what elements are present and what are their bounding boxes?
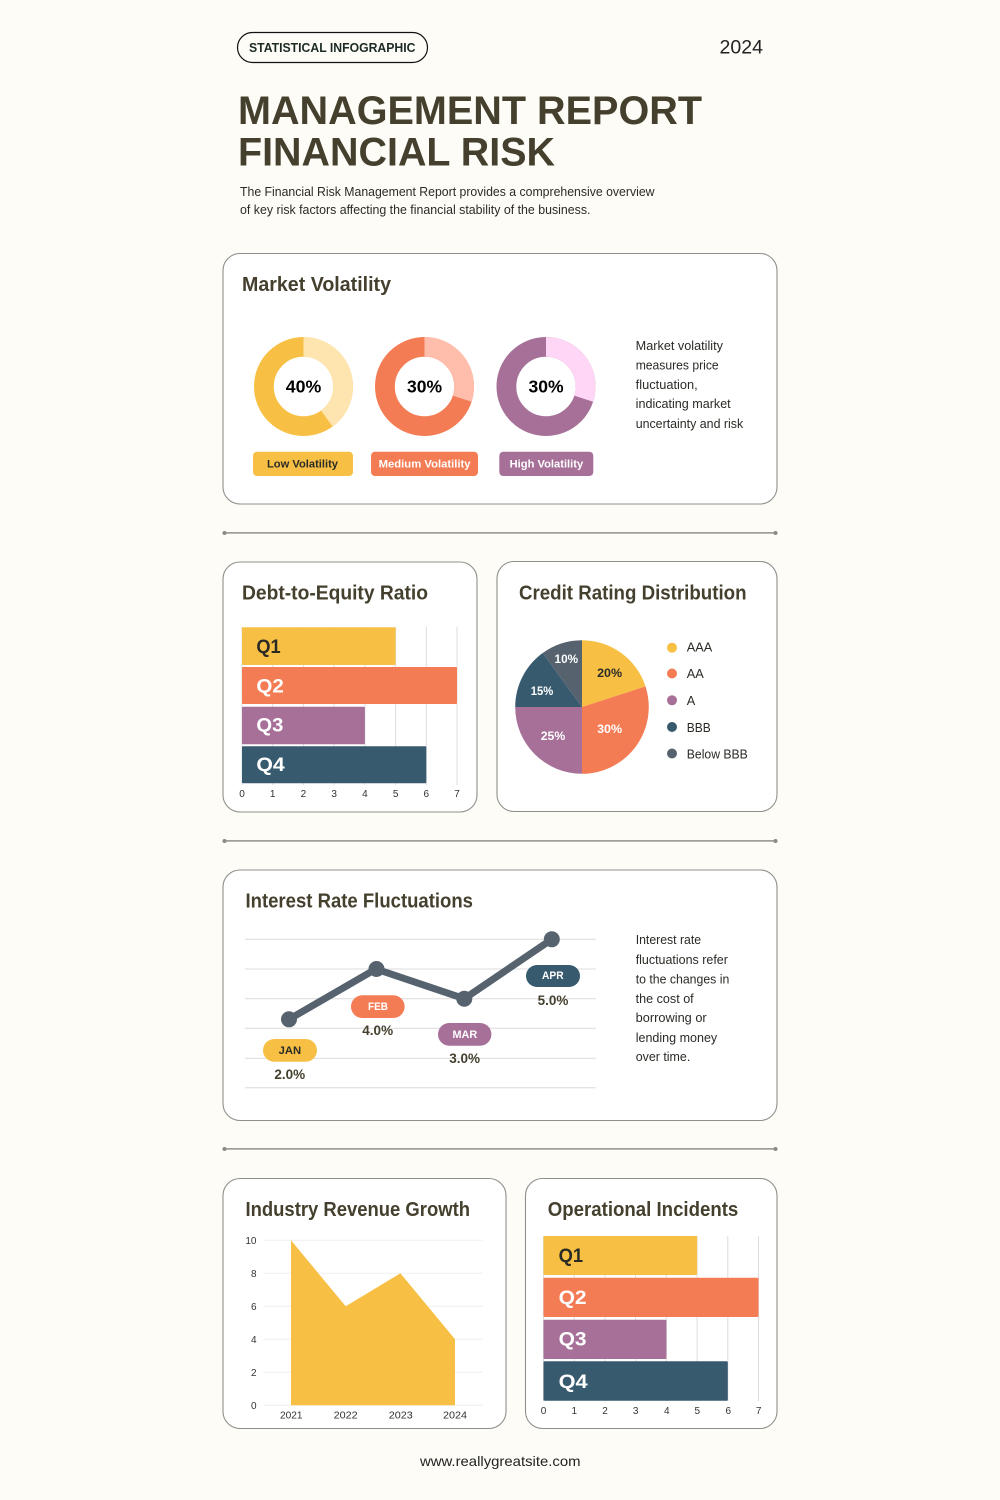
horizontal bar chart: incidents: Q3 (559, 1329, 587, 1351)
data label: march: MAR (452, 1029, 477, 1041)
area chart: revenue growth (245, 1236, 482, 1422)
area chart: revenue growth: 2022 (334, 1410, 358, 1422)
horizontal bar chart: incidents: 1 (572, 1406, 578, 1417)
area chart: revenue growth: 8 (251, 1269, 257, 1280)
text: market volatility description (636, 339, 744, 431)
horizontal bar chart: debt-to-equity: 1 (270, 789, 276, 800)
label: medium volatility (371, 452, 478, 476)
data label: april: APR (542, 970, 564, 982)
area chart: revenue growth: 2024 (443, 1410, 467, 1422)
data label: february: 4.0% (362, 1023, 393, 1038)
text: interest rate description (636, 933, 729, 1064)
heading: debt-to-equity ratio: Debt-to-Equity Ratio (242, 582, 428, 604)
area chart: revenue growth: 6 (251, 1302, 257, 1313)
data label: march: 3.0% (449, 1051, 480, 1066)
legend: credit ratings: AA (687, 667, 704, 681)
horizontal bar chart: debt-to-equity: 5 (393, 789, 399, 800)
data label: february: FEB (368, 1001, 388, 1013)
legend: credit ratings: Below BBB (687, 748, 748, 762)
intro text: The Financial Risk Management Report provides a comprehensive overview (240, 185, 655, 199)
data label: february (351, 995, 405, 1038)
header tag pill: STATISTICAL INFOGRAPHIC (249, 41, 416, 55)
legend: credit ratings (667, 640, 748, 762)
horizontal bar chart: debt-to-equity: 4 (362, 789, 368, 800)
footer url: www.reallygreatsite.com (419, 1453, 580, 1469)
pie chart: credit ratings: 20% (597, 666, 622, 680)
horizontal bar chart: incidents: 7 (756, 1406, 762, 1417)
text: interest rate description: Interest rate (636, 933, 701, 947)
horizontal bar chart: debt-to-equity (239, 627, 460, 800)
text: interest rate description: borrowing or (636, 1011, 707, 1025)
text: market volatility description: uncertainty and risk (636, 417, 744, 431)
pie chart: credit ratings: 25% (541, 729, 566, 743)
horizontal bar chart: debt-to-equity: 6 (424, 789, 430, 800)
horizontal bar chart: incidents: 5 (695, 1406, 701, 1417)
text: market volatility description: fluctuation, (636, 378, 698, 392)
data label: april (526, 965, 580, 1008)
heading: credit rating distribution: Credit Rating Distribution (519, 582, 746, 604)
text: interest rate description: lending money (636, 1031, 718, 1045)
panel: debt-to-equity ratio (223, 562, 477, 812)
text: interest rate description: to the changes in (636, 972, 729, 986)
horizontal bar chart: debt-to-equity: Q4 (256, 754, 285, 776)
intro text: of key risk factors affecting the financial stability of the business. (240, 203, 590, 217)
donut: low volatility 40% (264, 347, 343, 426)
horizontal bar chart: debt-to-equity: 7 (454, 789, 460, 800)
data label: january: JAN (279, 1045, 301, 1057)
label: high volatility (499, 452, 593, 476)
title: MANAGEMENT REPORT (238, 89, 702, 133)
panel: credit rating distribution (497, 562, 777, 812)
horizontal bar chart: incidents: Q1 (559, 1245, 583, 1267)
horizontal bar chart: incidents: Q4 (559, 1371, 588, 1393)
title: FINANCIAL RISK (238, 130, 555, 174)
area chart: revenue growth: 2 (251, 1368, 257, 1379)
label: low volatility: Low Volatility (267, 458, 339, 470)
divider 2 (222, 839, 778, 843)
legend: credit ratings: BBB (687, 721, 711, 735)
title (238, 89, 702, 174)
area chart: revenue growth: 2023 (389, 1410, 413, 1422)
heading: operational incidents: Operational Incidents (548, 1199, 738, 1221)
legend: credit ratings: AAA (687, 640, 713, 654)
horizontal bar chart: debt-to-equity: Q3 (256, 715, 284, 737)
panel: market volatility (223, 254, 777, 504)
heading: interest rate fluctuations: Interest Rate Fluctuations (246, 890, 473, 912)
data label: march (438, 1023, 491, 1066)
heading: market volatility: Market Volatility (242, 274, 392, 296)
horizontal bar chart: incidents (541, 1236, 762, 1417)
pie chart: credit ratings: 30% (597, 722, 622, 736)
text: interest rate description: the cost of (636, 992, 694, 1006)
divider 1 (222, 531, 778, 535)
data label: january: 2.0% (274, 1067, 305, 1082)
area chart: revenue growth: 4 (251, 1335, 257, 1346)
pie chart: credit ratings: 15% (531, 684, 554, 698)
area chart: revenue growth: 0 (251, 1401, 257, 1412)
text: market volatility description: indicating market (636, 397, 731, 411)
label: high volatility: High Volatility (510, 458, 584, 470)
horizontal bar chart: debt-to-equity: 3 (331, 789, 337, 800)
data label: january (263, 1039, 317, 1082)
heading: industry revenue growth: Industry Revenue Growth (246, 1199, 470, 1221)
pie chart: credit ratings: 10% (555, 652, 578, 666)
horizontal bar chart: debt-to-equity: 0 (239, 789, 245, 800)
line chart: interest rates (245, 931, 596, 1088)
horizontal bar chart: incidents: 2 (602, 1406, 608, 1417)
label: medium volatility: Medium Volatility (379, 458, 472, 470)
panel: operational incidents (526, 1178, 777, 1428)
year: 2024 (720, 38, 763, 58)
horizontal bar chart: incidents: 0 (541, 1406, 547, 1417)
area chart: revenue growth: 2021 (280, 1410, 303, 1422)
horizontal bar chart: debt-to-equity: 2 (301, 789, 307, 800)
horizontal bar chart: debt-to-equity: Q1 (256, 636, 281, 658)
donut: low volatility 40%: 40% (286, 376, 322, 396)
area chart: revenue growth: 10 (245, 1236, 257, 1247)
intro text (240, 185, 655, 217)
label: low volatility (253, 452, 353, 476)
horizontal bar chart: incidents: Q2 (559, 1287, 587, 1309)
horizontal bar chart: incidents: 3 (633, 1406, 639, 1417)
horizontal bar chart: incidents: 6 (726, 1406, 732, 1417)
panel: interest rate fluctuations (223, 870, 777, 1120)
horizontal bar chart: debt-to-equity: Q2 (256, 675, 284, 697)
panel: industry revenue growth (223, 1178, 506, 1428)
data label: april: 5.0% (538, 993, 568, 1008)
text: interest rate description: fluctuations refer (636, 953, 728, 967)
text: interest rate description: over time. (636, 1050, 690, 1064)
header tag pill (238, 32, 428, 62)
pie chart: credit ratings (515, 640, 649, 774)
text: market volatility description: Market volatility (636, 339, 724, 353)
legend: credit ratings: A (687, 694, 696, 708)
donut: medium volatility 30% (385, 347, 464, 426)
donut: medium volatility 30%: 30% (407, 376, 442, 396)
divider 3 (222, 1147, 778, 1151)
horizontal bar chart: incidents: 4 (664, 1406, 670, 1417)
donut: high volatility 30% (506, 347, 586, 426)
donut: high volatility 30%: 30% (528, 376, 564, 396)
text: market volatility description: measures price (636, 358, 719, 372)
